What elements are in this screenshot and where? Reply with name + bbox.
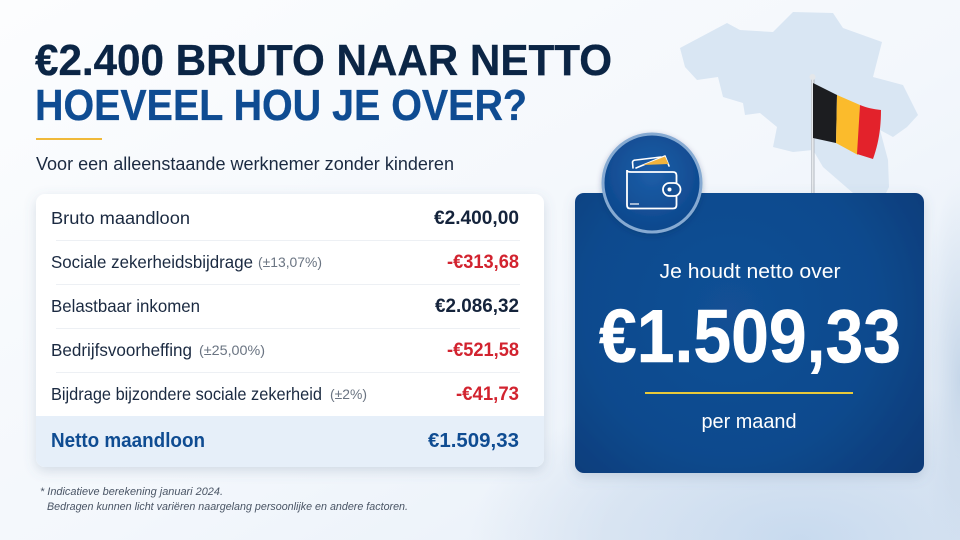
row: belastbaar inkomen: Belastbaar inkomen — [51, 296, 200, 316]
row: bruto maandloon: Bruto maandloon — [51, 208, 190, 228]
row highlight: netto — [36, 416, 544, 467]
row: sociale zekerheidsbijdrage: (±13,07%) — [258, 254, 322, 270]
row: bruto maandloon: €2.400,00 — [434, 208, 519, 229]
footnote: Bedragen kunnen licht variëren naargelang persoonlijke en andere factoren. — [47, 501, 408, 513]
title: HOEVEEL HOU JE OVER? — [35, 81, 527, 130]
accent line — [645, 392, 853, 394]
accent line — [36, 138, 102, 140]
label: je houdt netto over: Je houdt netto over — [660, 261, 841, 283]
row: belastbaar inkomen: €2.086,32 — [435, 296, 519, 317]
row: bedrijfsvoorheffing: -€521,58 — [447, 340, 519, 361]
label: per maand: per maand — [702, 411, 796, 433]
footnote — [40, 486, 408, 513]
subtitle: Voor een alleenstaande werknemer zonder kinderen — [36, 154, 454, 174]
title: €2.400 BRUTO NAAR NETTO — [35, 36, 612, 85]
row: belastbaar inkomen — [51, 296, 519, 317]
row: netto maandloon: Netto maandloon — [51, 430, 205, 452]
row: sociale zekerheidsbijdrage: -€313,68 — [447, 252, 519, 273]
row: bijzondere sociale zekerheid: Bijdrage bijzondere sociale zekerheid — [51, 384, 322, 404]
flag of Belgium on pole — [810, 74, 881, 193]
row: netto maandloon: €1.509,33 — [428, 430, 519, 452]
panel: netto result — [575, 193, 924, 473]
panel: salary table — [36, 194, 544, 467]
row: bedrijfsvoorheffing: Bedrijfsvoorheffing — [51, 340, 192, 360]
big amount: €1.509,33 — [599, 294, 901, 378]
icon: wallet badge — [603, 134, 701, 232]
map of Belgium — [680, 12, 918, 193]
row: bijzondere sociale zekerheid: (±2%) — [330, 386, 367, 402]
row: netto maandloon — [51, 430, 519, 452]
row: bijzondere sociale zekerheid: -€41,73 — [456, 384, 519, 405]
row: bedrijfsvoorheffing — [51, 340, 519, 361]
row: sociale zekerheidsbijdrage: Sociale zekerheidsbijdrage — [51, 252, 253, 272]
footnote: * Indicatieve berekening januari 2024. — [40, 486, 223, 498]
title — [35, 36, 612, 130]
row: bruto maandloon — [51, 208, 519, 229]
row: bijzondere sociale zekerheid — [51, 384, 519, 405]
row: bedrijfsvoorheffing: (±25,00%) — [199, 342, 265, 358]
row: sociale zekerheidsbijdrage — [51, 252, 519, 273]
